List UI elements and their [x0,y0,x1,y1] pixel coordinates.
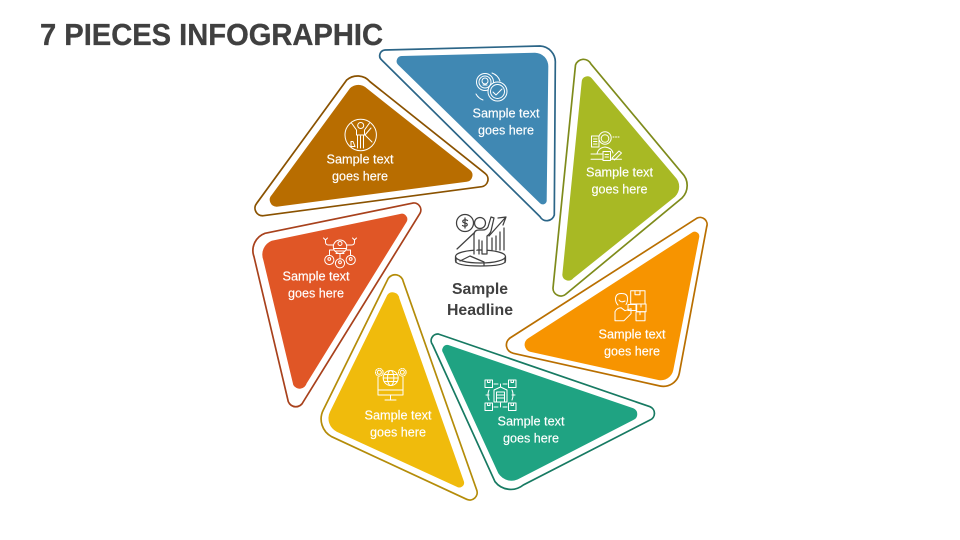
title: 7 PIECES INFOGRAPHIC [40,17,383,52]
icon: target with check [476,73,507,101]
icon: robot with people [324,238,356,268]
text: teal label: Sample text [498,414,565,428]
heading: sample headline line 2: Headline [447,302,513,319]
panel: blue piece [380,46,555,221]
panel: teal piece [431,334,654,489]
text: blue label line 2: goes here [478,124,534,138]
icon: central person on pie chart [456,214,506,266]
panel: yellow piece [321,275,477,500]
text: blue label: Sample text [472,106,540,120]
panel: brown piece [255,76,488,216]
icon: person in circle [345,119,376,151]
text: yellow label: Sample text [364,408,432,422]
text: red label line 2: goes here [288,286,344,300]
text: green label: Sample text [586,166,654,180]
icon: monitor with globe [376,368,406,400]
icon: person with boxes [615,291,646,321]
text: teal label line 2: goes here [503,432,559,446]
text: brown label: Sample text [326,152,394,166]
text: green label line 2: goes here [592,182,648,196]
icon: warehouse network [485,380,516,410]
text: brown label line 2: goes here [332,170,388,184]
panel: green piece [553,59,687,296]
text: red label: Sample text [282,270,350,284]
heading: sample headline: Sample [452,281,508,298]
panel: orange piece [506,217,707,386]
icon: person at desk [591,132,622,160]
text: orange label: Sample text [598,328,666,342]
text: yellow label line 2: goes here [370,426,426,440]
text: orange label line 2: goes here [604,344,660,358]
panel: red piece [253,203,421,407]
